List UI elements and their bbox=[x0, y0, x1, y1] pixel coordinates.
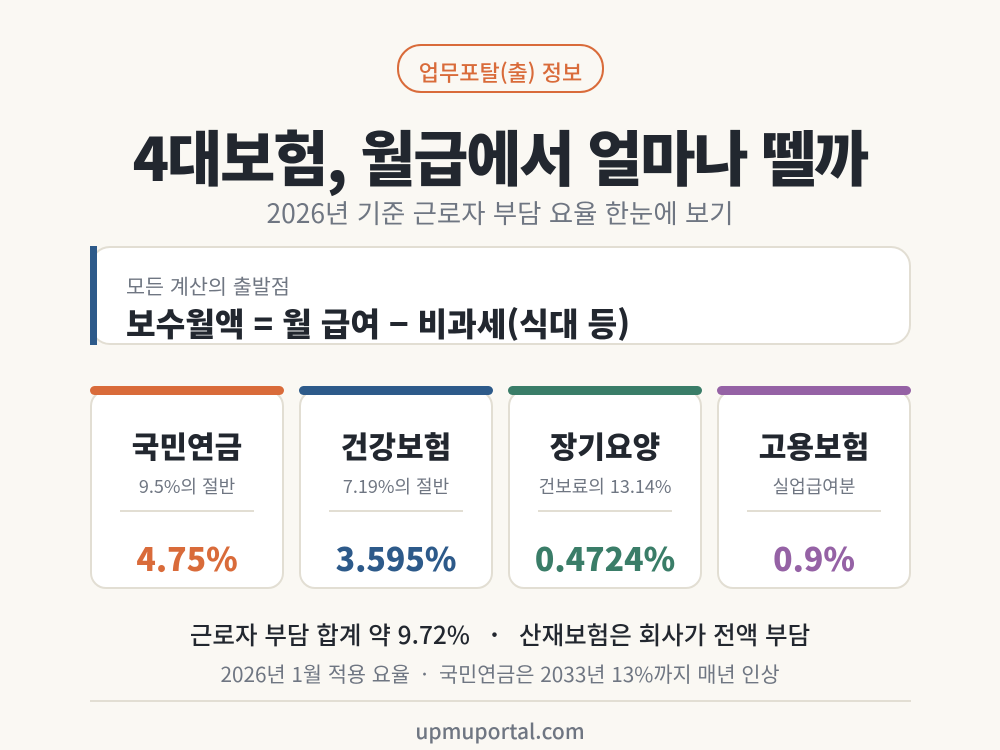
card accent: 건강보험 bbox=[299, 386, 493, 395]
card rate: 0.4724% bbox=[535, 535, 675, 581]
badge: 업무포탈(출) 정보 bbox=[419, 56, 582, 88]
subtitle: 2026년 기준 근로자 부담 요율 한눈에 보기 bbox=[266, 192, 734, 231]
card rate: 4.75% bbox=[136, 535, 238, 581]
card title: 고용보험 bbox=[759, 423, 869, 467]
title: 4대보험, 월급에서 얼마나 뗄까 bbox=[133, 112, 867, 199]
formula text: 보수월액 = 월 급여 − 비과세(식대 등) bbox=[126, 300, 630, 346]
card rate: 3.595% bbox=[336, 535, 456, 581]
card: 건강보험 bbox=[299, 390, 493, 589]
card: 국민연금 bbox=[90, 390, 284, 589]
card: 고용보험 bbox=[717, 390, 911, 589]
formula label: 모든 계산의 출발점 bbox=[126, 270, 290, 300]
card title: 건강보험 bbox=[341, 423, 451, 467]
card rate: 0.9% bbox=[773, 535, 855, 581]
card: 장기요양 bbox=[508, 390, 702, 589]
accent bar bbox=[90, 246, 97, 345]
badge bbox=[397, 44, 604, 93]
card note: 9.5%의 절반 bbox=[139, 473, 235, 499]
panel background bbox=[90, 246, 911, 345]
website: upmuportal.com bbox=[415, 716, 585, 746]
card accent: 국민연금 bbox=[90, 386, 284, 395]
card note: 7.19%의 절반 bbox=[343, 473, 449, 499]
card title: 장기요양 bbox=[550, 423, 660, 467]
card title: 국민연금 bbox=[132, 423, 242, 467]
card note: 실업급여분 bbox=[773, 473, 855, 499]
summary line: 근로자 부담 합계 약 9.72% · 산재보험은 회사가 전액 부담 bbox=[190, 617, 810, 652]
footnote: 2026년 1월 적용 요율 · 국민연금은 2033년 13%까지 매년 인상 bbox=[220, 658, 780, 688]
card accent: 장기요양 bbox=[508, 386, 702, 395]
panel: base formula bbox=[90, 246, 911, 346]
card note: 건보료의 13.14% bbox=[539, 473, 671, 499]
card accent: 고용보험 bbox=[717, 386, 911, 395]
